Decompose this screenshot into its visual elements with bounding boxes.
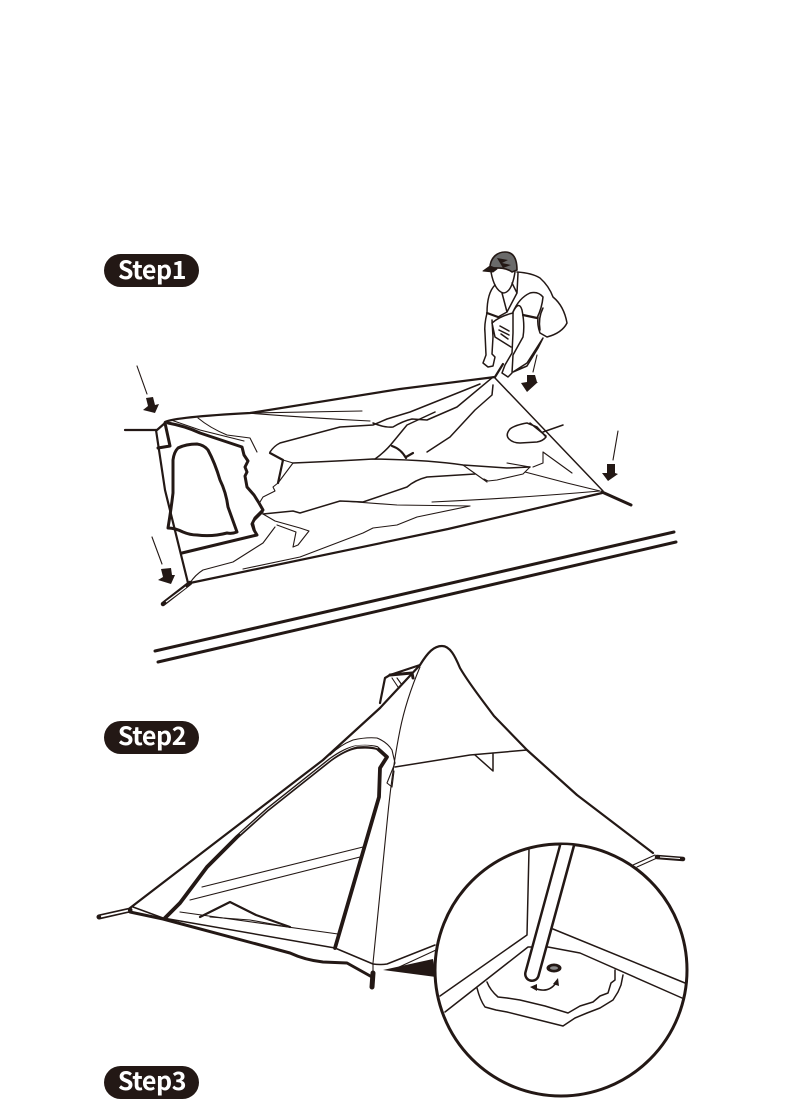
person crouching (483, 252, 567, 377)
magnified detail circle (435, 838, 687, 1096)
tent floor outline (156, 377, 603, 583)
left guy line (99, 910, 130, 917)
step 3 label: Step3 (118, 1062, 186, 1098)
tent base (130, 907, 435, 977)
seam bands (440, 850, 685, 1012)
shadow wedge (383, 950, 436, 977)
arrow: top left (137, 366, 159, 413)
arrow: bottom left (152, 537, 175, 584)
roof vent (380, 665, 420, 703)
right guy line (633, 855, 683, 867)
grommet (546, 964, 562, 972)
icon: cap (483, 252, 517, 272)
door (165, 738, 395, 948)
tent body outline (130, 646, 653, 908)
step 2 label: Step2 (118, 717, 186, 753)
inner tent lines (190, 847, 363, 927)
front seam (373, 667, 420, 975)
arrow: top right (521, 355, 538, 392)
step 3 label (104, 1062, 199, 1099)
step 1 label: Step1 (118, 251, 186, 287)
guy lines at corners (125, 364, 631, 604)
peg (372, 973, 373, 987)
step 2 illustration: pitched tent (99, 646, 683, 987)
ground lines (155, 532, 676, 662)
tent pole (532, 838, 569, 974)
door panel (158, 418, 263, 553)
step 2 label (104, 717, 199, 754)
step 1 illustration: laying out the tent (125, 252, 631, 604)
footprint outline (477, 970, 623, 1026)
icon: stake bag (507, 423, 563, 443)
arrow: right (602, 431, 618, 481)
horizontal seam and tab (395, 750, 527, 771)
fabric wrinkles (190, 377, 600, 583)
curved arrow (530, 978, 559, 991)
